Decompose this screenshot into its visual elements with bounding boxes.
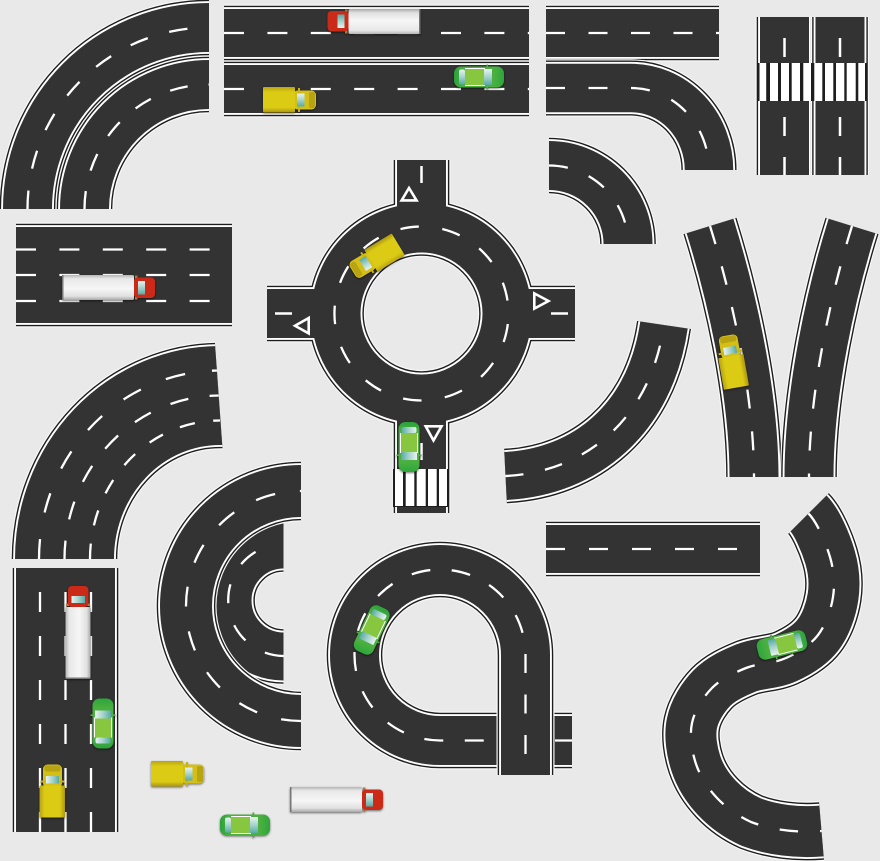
vehicle: loose green car bbox=[220, 812, 270, 838]
road: short straight bbox=[546, 548, 760, 550]
stub marking bbox=[555, 739, 572, 742]
road: straight top right bbox=[546, 32, 719, 34]
roundabout bbox=[267, 160, 575, 513]
vehicle: yellow van Y road bbox=[715, 333, 749, 390]
road: Y right branch bbox=[809, 226, 852, 477]
vehicle: loose truck bbox=[290, 787, 383, 812]
road: curve beside roundabout bbox=[506, 325, 664, 476]
vehicle: green car loop bbox=[350, 602, 394, 658]
vehicle: yellow van vertical road bbox=[40, 764, 65, 818]
give-way triangles bbox=[295, 188, 548, 440]
zebra stripes bbox=[757, 63, 867, 101]
road: straight into curve top right bbox=[546, 88, 709, 170]
vehicle: truck vertical road bbox=[66, 586, 90, 679]
pedestrian crossing bbox=[393, 469, 449, 507]
ring lane markings bbox=[334, 226, 508, 400]
vehicle: green car vertical road bbox=[90, 698, 116, 748]
road: two straight lanes top centre bbox=[224, 33, 529, 89]
spur lane markings bbox=[275, 166, 568, 460]
road: inner half ring bbox=[228, 544, 284, 656]
road: four lane straight left bbox=[16, 250, 232, 301]
vehicle: yellow van top road bbox=[263, 87, 316, 112]
vehicle: yellow van roundabout bbox=[346, 233, 405, 283]
road: loop bbox=[354, 570, 572, 775]
road: double lane with zebra crossing bbox=[757, 17, 867, 175]
road: S curve bbox=[691, 514, 834, 832]
road: four lane straight bottom left bbox=[40, 568, 91, 832]
road: outer half ring bbox=[186, 491, 301, 721]
road: small arc bbox=[549, 166, 628, 244]
vehicle: green car S curve bbox=[755, 627, 809, 663]
vehicle: green car roundabout bbox=[396, 422, 422, 472]
vehicle: green car top road bbox=[454, 64, 504, 90]
vehicle: truck left road bbox=[62, 275, 155, 300]
vehicle: truck top road bbox=[328, 9, 420, 34]
road: double curve top left bbox=[28, 28, 209, 209]
vehicle: loose yellow van bbox=[151, 761, 204, 786]
loop overpass section bbox=[524, 655, 526, 775]
road: Y left branch bbox=[710, 226, 754, 477]
loop lane markings bbox=[354, 570, 526, 754]
road: wide four lane curve bbox=[39, 370, 235, 559]
